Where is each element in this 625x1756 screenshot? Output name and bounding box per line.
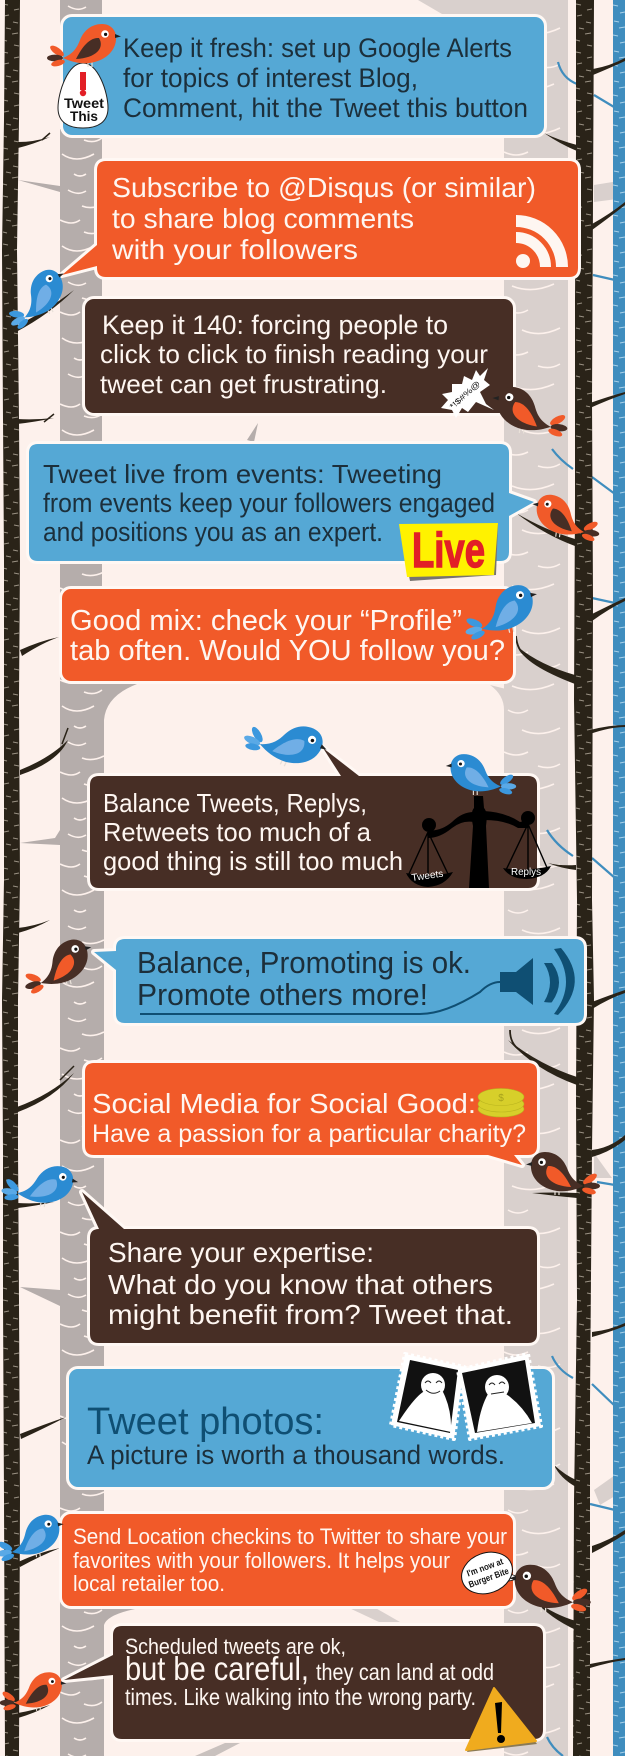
text: good mix: [70, 605, 505, 667]
text: balance tweets: Balance Tweets, Replys,: [103, 788, 367, 818]
icon: tweet this egg: This: [70, 108, 98, 124]
panel: share your expertise: [82, 1192, 537, 1343]
panel: good mix: [62, 589, 513, 681]
icon: swear burst: *!$#%@: [448, 379, 482, 411]
bird: blue, location: [0, 1512, 68, 1563]
bird: brown, promoting: [17, 935, 99, 997]
text: scheduled tweets: but be careful,: [125, 1650, 309, 1687]
bird: blue, on scales: [446, 754, 516, 796]
text: tweet live: and positions you as an expert.: [43, 517, 383, 547]
panel: tweet live from events: [29, 444, 534, 581]
icon: check-in speech bubble: Burger Bite: [467, 1566, 510, 1590]
bird: brown, social good: [526, 1152, 600, 1196]
text: keep it 140: click to click to finish reading your: [100, 339, 488, 369]
text: subscribe: Subscribe to @Disqus (or similar): [112, 172, 536, 203]
panel: balance promoting: [94, 939, 584, 1023]
text: location checkins: Send Location checkins to Twitter to share your: [73, 1524, 507, 1549]
panel: keep it 140: [85, 299, 513, 418]
text: keep it 140: Keep it 140: forcing people to: [102, 310, 448, 340]
icon: tweet this egg: [58, 63, 108, 128]
text: share your expertise: What do you know that others: [108, 1269, 493, 1300]
bird: blue, good mix: [458, 581, 544, 642]
icon: warning triangle: [466, 1688, 537, 1752]
text: location checkins: local retailer too.: [73, 1571, 225, 1596]
text: share your expertise: might benefit from? Tweet that.: [108, 1299, 513, 1330]
text: share your expertise: [108, 1237, 513, 1330]
dark tree, left: [2, 0, 74, 1756]
icon: stamp happy face: [391, 1354, 464, 1439]
text: keep it fresh: Comment, hit the Tweet this button: [123, 93, 528, 123]
text: scheduled tweets: times. Like walking into the wrong party.: [125, 1684, 476, 1710]
text: scheduled tweets: Scheduled tweets are ok,: [125, 1634, 346, 1659]
bird: blue, flying: [240, 704, 332, 780]
panel: balance tweets: [90, 748, 551, 888]
icon: check-in speech bubble: I'm now at: [465, 1556, 505, 1579]
panel: subscribe to Disqus: [62, 161, 578, 277]
text: share your expertise: Share your expertise:: [108, 1237, 374, 1268]
panel: keep it fresh: [63, 17, 544, 135]
text: keep it 140: tweet can get frustrating.: [100, 369, 387, 399]
text: location checkins: [73, 1524, 507, 1596]
icon: swear burst: [441, 368, 494, 418]
text: tweet live: [43, 459, 495, 547]
icon: balance scales: Tweets: [411, 869, 444, 884]
text: subscribe: to share blog comments: [112, 203, 414, 234]
icon: stamp sad face: [458, 1354, 541, 1439]
bird: blue, subscribe: [0, 263, 78, 333]
icon: balance scales: Replys: [511, 867, 541, 878]
dark tree, right: [508, 0, 625, 1756]
grey birch tree, right: [347, 0, 625, 1756]
icon: tweet this egg: Tweet: [64, 95, 104, 111]
icon: live sign: Live: [412, 524, 485, 578]
text: location checkins: favorites with your followers. It helps your: [73, 1548, 450, 1573]
blue tree, far right: [547, 0, 625, 1756]
bird: brown, keep it 140: [489, 385, 571, 439]
text: social good: [92, 1088, 526, 1148]
grey birch tree, left: [18, 0, 258, 1756]
text: tweet live: Tweet live from events: Tweeting: [43, 459, 442, 489]
text: keep it fresh: for topics of interest Blog,: [123, 63, 418, 93]
icon: check-in speech bubble: [456, 1545, 522, 1601]
text: scheduled tweets: they can land at odd: [316, 1659, 494, 1685]
text: picture: A picture is worth a thousand words.: [87, 1440, 505, 1470]
text: good mix: Good mix: check your “Profile”: [70, 605, 462, 637]
text: balance tweets: [103, 788, 403, 876]
text: keep it fresh: [123, 33, 528, 123]
panel: tweet photos: [69, 1354, 552, 1487]
icon: speaker with cable: [140, 948, 575, 1015]
text: balance promoting: Balance, Promoting is ok.: [137, 945, 471, 980]
text: scheduled tweets: [125, 1634, 494, 1710]
bird: orange, live events: [528, 492, 604, 543]
text: balance promoting: [137, 945, 471, 1012]
text: keep it fresh: Keep it fresh: set up Google Alerts: [123, 33, 512, 63]
text: balance promoting: Promote others more!: [137, 977, 428, 1012]
panel: scheduled tweets: [64, 1626, 543, 1752]
icon: coins: $: [498, 1093, 504, 1104]
icon: RSS feed: [516, 221, 562, 268]
text: balance tweets: good thing is still too much: [103, 846, 403, 876]
text: subscribe: [111, 172, 536, 265]
panel: social good: [85, 1063, 537, 1165]
heading: tweet photos: Tweet photos:: [87, 1401, 324, 1443]
bird: orange, on egg: [47, 24, 121, 68]
bird: blue, expertise: [0, 1157, 80, 1213]
text: subscribe: with your followers: [111, 234, 358, 265]
panel: location checkins: [62, 1514, 522, 1606]
bird: orange, scheduled: [0, 1672, 66, 1712]
text: good mix: tab often. Would YOU follow you?: [70, 635, 505, 667]
bird: brown, location: [509, 1565, 591, 1613]
text: social good: Have a passion for a particular charity?: [92, 1120, 526, 1148]
text: social good: Social Media for Social Good:: [92, 1088, 476, 1119]
text: balance tweets: Retweets too much of a: [103, 817, 372, 847]
icon: balance scales: [406, 796, 551, 888]
text: keep it 140: [100, 310, 488, 399]
icon: coins: [478, 1088, 524, 1117]
text: tweet live: from events keep your followers engaged: [43, 488, 495, 518]
